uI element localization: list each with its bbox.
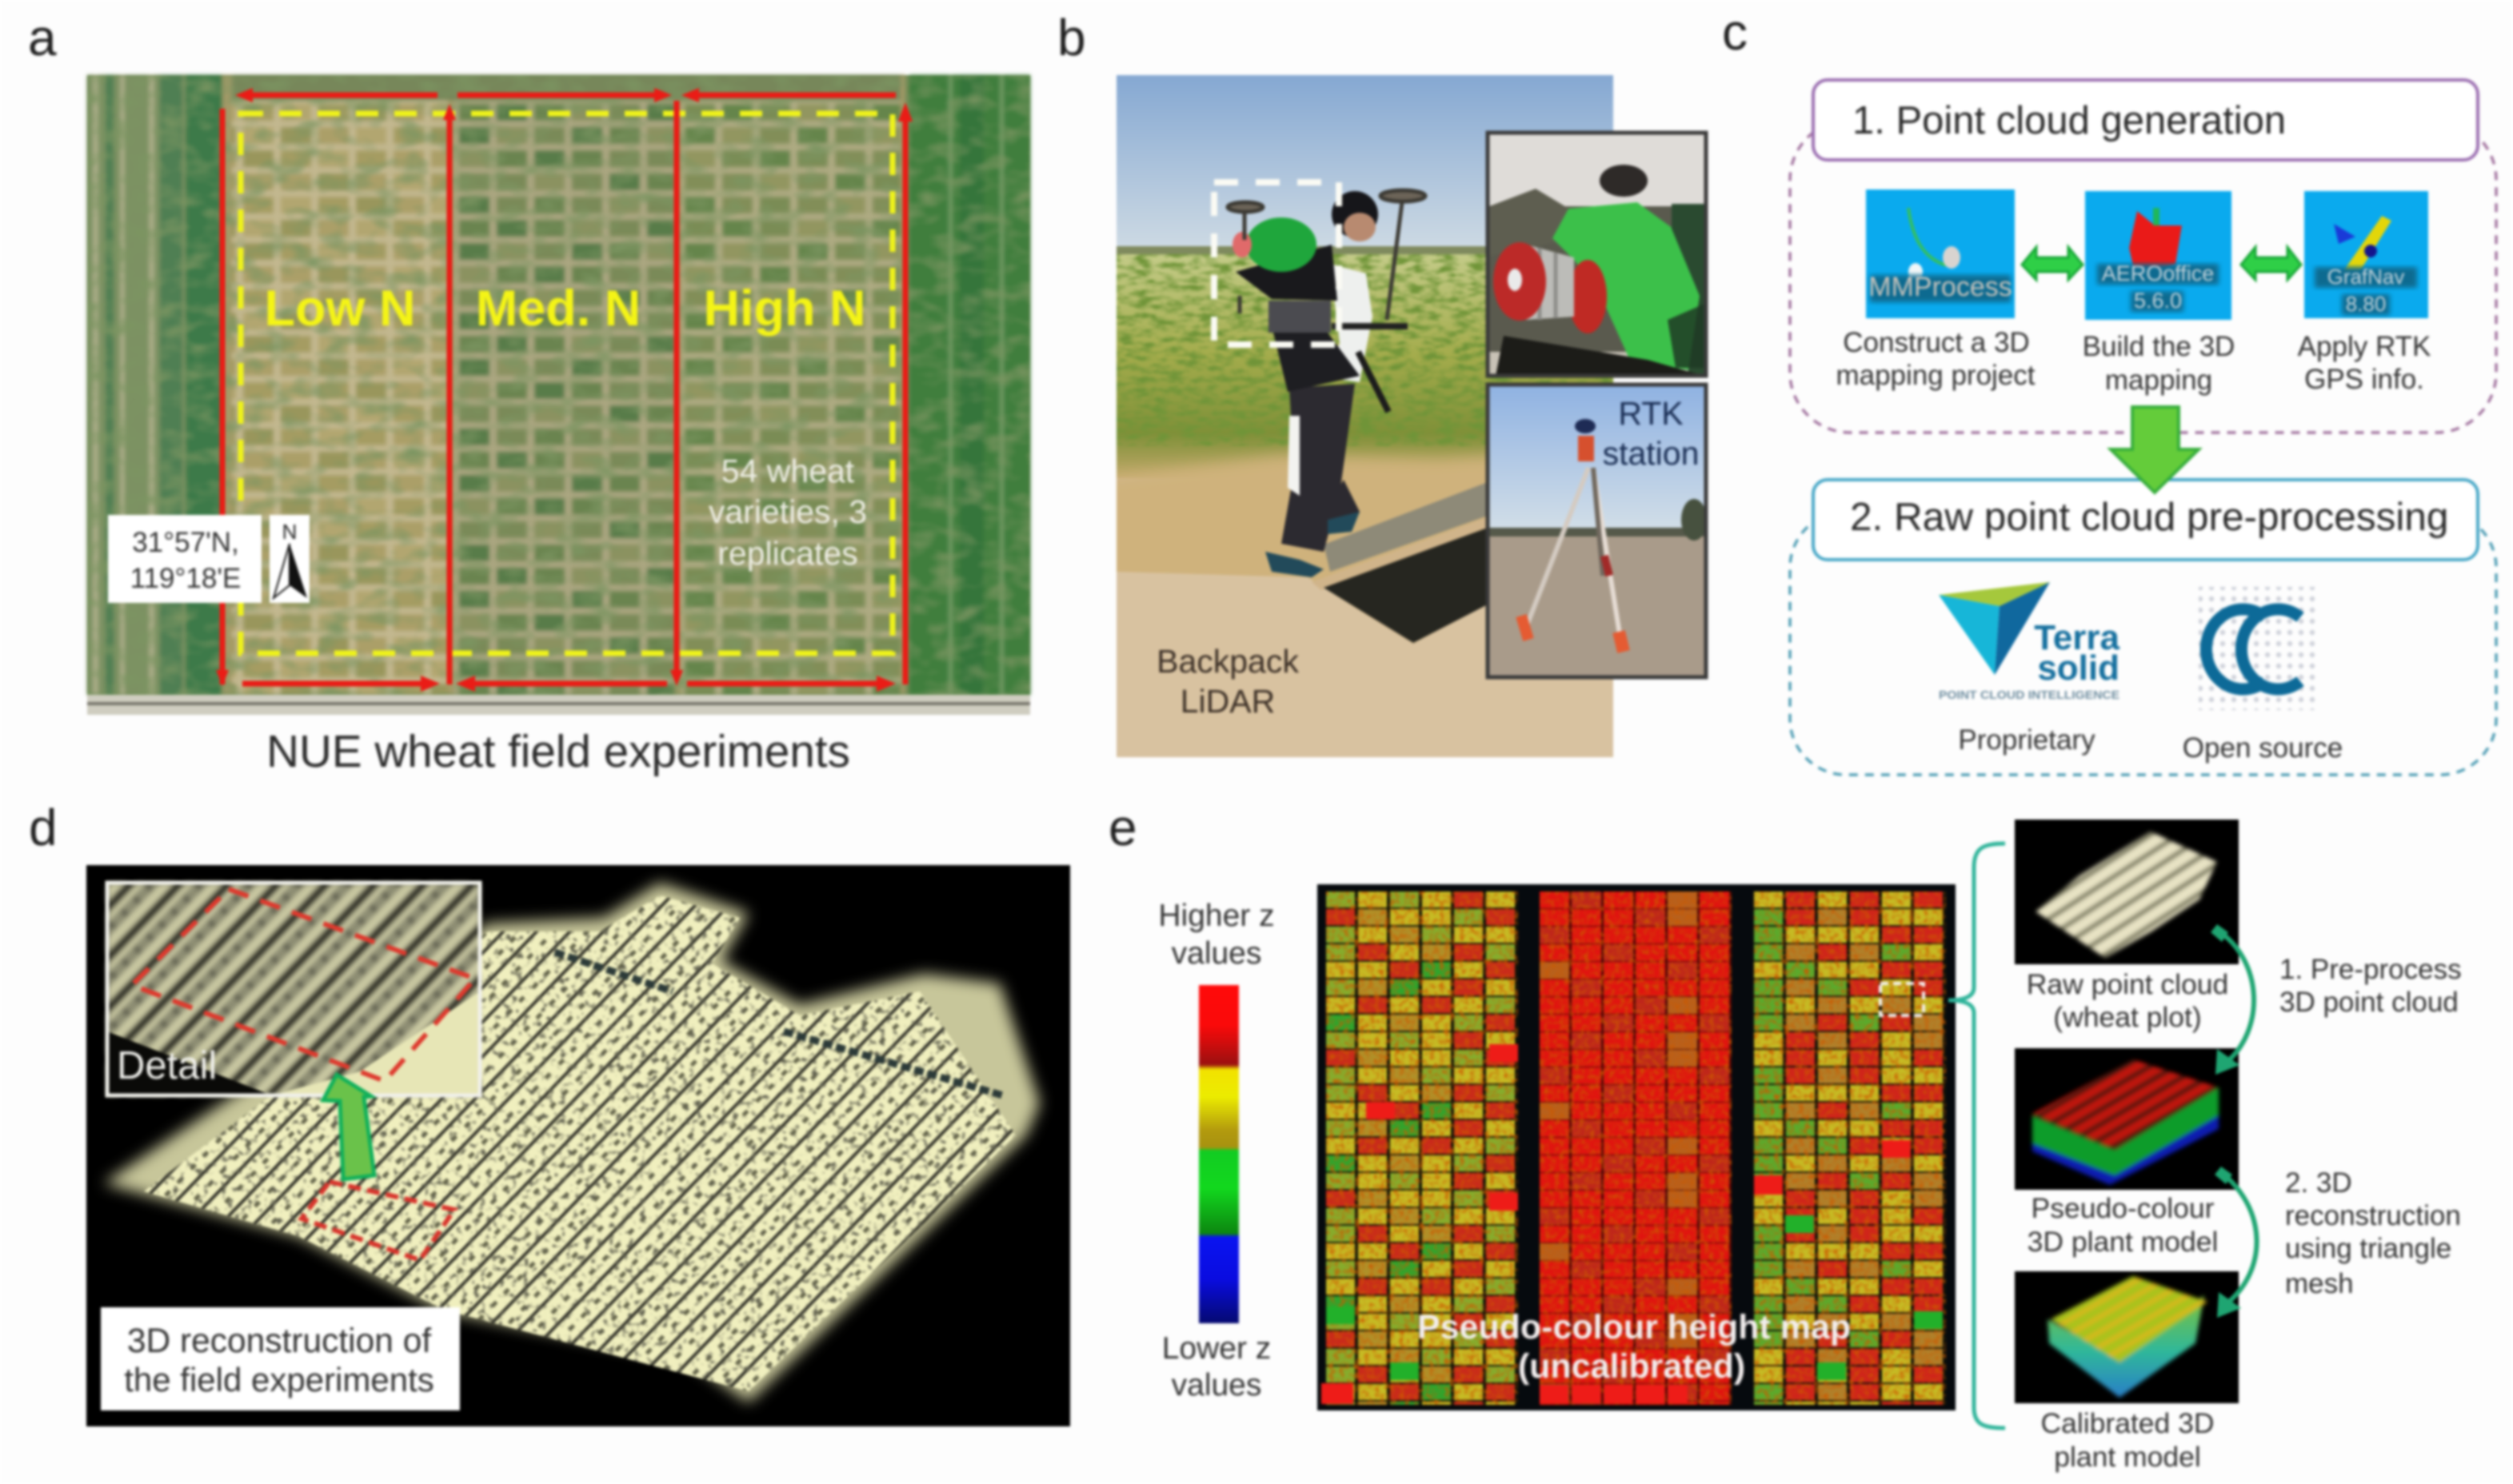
aerial field photograph [87, 75, 1030, 715]
icon: AEROoffice: 5.6.0 [2134, 289, 2182, 313]
panel label d: d [29, 799, 58, 856]
raw point cloud label: (wheat plot) [2053, 1001, 2202, 1033]
yellow dashed outline [241, 114, 893, 653]
map caption: (uncalibrated) [1518, 1347, 1745, 1386]
Backpack LiDAR label [1157, 643, 1299, 720]
step 1 sub-labels [1836, 327, 2431, 396]
panel label b: b [1057, 9, 1086, 66]
3D reconstruction label: mesh [2285, 1268, 2354, 1299]
bracket [1948, 844, 2005, 1428]
varieties note: 54 wheat [721, 453, 855, 489]
colour scale [1158, 899, 1275, 1402]
pseudo-colour model [2015, 1048, 2239, 1190]
colour scale: values [1172, 936, 1261, 971]
dashed container: step 1 [1790, 120, 2496, 433]
varieties note [709, 453, 867, 572]
caption box: 3D reconstruction of [127, 1322, 431, 1360]
3D reconstruction label [2285, 1167, 2461, 1299]
pre-process label: 1. Pre-process [2279, 954, 2462, 985]
panel a: NUE wheat field [28, 9, 1030, 776]
varieties note: varieties, 3 [709, 493, 867, 530]
step 1 sub-labels: Build the 3D [2083, 331, 2235, 362]
detail inset [107, 883, 480, 1095]
3D reconstruction label: 2. 3D [2285, 1167, 2352, 1199]
RTK station label [1603, 395, 1699, 472]
pseudo-colour label: 3D plant model [2028, 1226, 2218, 1258]
icon: GrafNav [2304, 191, 2428, 318]
step 1 heading [1813, 80, 2478, 160]
red dashed plot selection [302, 1182, 454, 1260]
icon: GrafNav: 8.80 [2346, 292, 2386, 316]
step 2 heading: 2. Raw point cloud pre-processing [1850, 495, 2448, 539]
3D reconstruction label: reconstruction [2285, 1200, 2461, 1231]
pre-process label [2279, 954, 2462, 1018]
tripod [1521, 468, 1624, 652]
icon: MMProcess [1866, 189, 2015, 318]
arrow: MMProcess to AEROoffice [2022, 247, 2083, 280]
caption: NUE wheat field experiments [266, 726, 850, 776]
panel label c: c [1722, 3, 1748, 61]
panel label a: a [28, 9, 57, 66]
step 1 heading: 1. Point cloud generation [1852, 99, 2286, 142]
logo: Terrasolid [1939, 582, 2120, 702]
icon: MMProcess: MMProcess [1868, 272, 2012, 302]
colour scale: values [1172, 1368, 1261, 1402]
calibrated label: plant model [2054, 1441, 2201, 1473]
red arrows [216, 88, 913, 692]
colour scale: Higher z [1158, 899, 1275, 933]
map caption [1417, 1308, 1851, 1386]
north arrow: N [282, 520, 297, 544]
logo: CloudCompare [2199, 587, 2319, 710]
calibrated label: Calibrated 3D [2040, 1407, 2215, 1439]
north arrow [270, 515, 310, 603]
white plot marker [1880, 983, 1924, 1015]
pre-process label: 3D point cloud [2279, 987, 2459, 1018]
pseudo-colour height map [1317, 884, 1956, 1410]
step 1 sub-labels: Apply RTK [2298, 331, 2431, 362]
field photograph [1096, 75, 1632, 757]
inset: RTK station [1488, 385, 1707, 677]
nitrogen level labels: Low N [265, 281, 415, 337]
calibrated model [2015, 1271, 2239, 1403]
step 1 sub-labels: GPS info. [2304, 364, 2424, 395]
arrow: step 1 to step 2 [2111, 407, 2199, 493]
caption box [101, 1307, 460, 1410]
panel d: 3D reconstruction [29, 799, 1070, 1426]
open source label: Open source [2183, 732, 2343, 764]
nitrogen level labels: High N [704, 281, 865, 337]
RTK station label: RTK [1618, 395, 1684, 432]
GNSS antennas [1228, 190, 1425, 320]
raw point cloud model [2015, 820, 2239, 964]
map caption: Pseudo-colour height map [1417, 1308, 1851, 1346]
icon: AEROoffice [2085, 191, 2231, 320]
panel e: height map [1109, 799, 2462, 1473]
panel b: backpack LiDAR [1057, 9, 1707, 757]
RTK station label: station [1603, 435, 1699, 472]
coordinates box: 119°18'E [130, 563, 241, 594]
panel label e: e [1109, 799, 1137, 856]
step 1 sub-labels: Construct a 3D [1843, 327, 2030, 358]
coordinates box: 31°57'N, [132, 527, 239, 558]
raw point cloud label [2027, 968, 2228, 1033]
white dashed highlight [1214, 182, 1339, 345]
coordinates box [108, 515, 262, 603]
step 2 heading [1813, 480, 2478, 560]
curved arrow: step 1 [2211, 924, 2254, 1075]
proprietary label: Proprietary [1958, 724, 2095, 756]
colour scale: Lower z [1162, 1331, 1271, 1366]
icon: AEROoffice: AEROoffice [2102, 261, 2214, 285]
arrow: AEROoffice to GrafNav [2241, 247, 2301, 280]
person with backpack scanner [1228, 190, 1425, 577]
varieties note: replicates [717, 535, 858, 572]
caption box: the field experiments [124, 1361, 434, 1398]
curved arrow: step 2 [2215, 1167, 2257, 1318]
dashed container: step 2 [1790, 512, 2496, 775]
inset: scanner close-up [1488, 133, 1706, 376]
raw point cloud label: Raw point cloud [2027, 968, 2228, 1000]
3D reconstruction label: using triangle [2285, 1233, 2451, 1264]
logo: Terrasolid: solid [2037, 648, 2119, 688]
logo: Terrasolid: POINT CLOUD INTELLIGENCE [1939, 689, 2119, 702]
nitrogen level labels: Med. N [476, 281, 641, 337]
green arrow [323, 1075, 374, 1179]
icon: GrafNav: GrafNav [2327, 265, 2404, 289]
pseudo-colour label [2028, 1192, 2218, 1258]
detail inset: Detail [117, 1044, 217, 1087]
step 1 sub-labels: mapping [2105, 365, 2212, 396]
nitrogen level labels [265, 281, 865, 337]
calibrated label [2040, 1407, 2215, 1473]
pseudo-colour label: Pseudo-colour [2032, 1192, 2215, 1224]
step 1 sub-labels: mapping project [1836, 360, 2036, 391]
logo: Terrasolid: Terra [2034, 618, 2120, 657]
Backpack LiDAR label: LiDAR [1181, 683, 1275, 720]
panel c: processing workflow [1722, 3, 2496, 775]
Backpack LiDAR label: Backpack [1157, 643, 1299, 680]
point cloud image [86, 865, 1070, 1426]
